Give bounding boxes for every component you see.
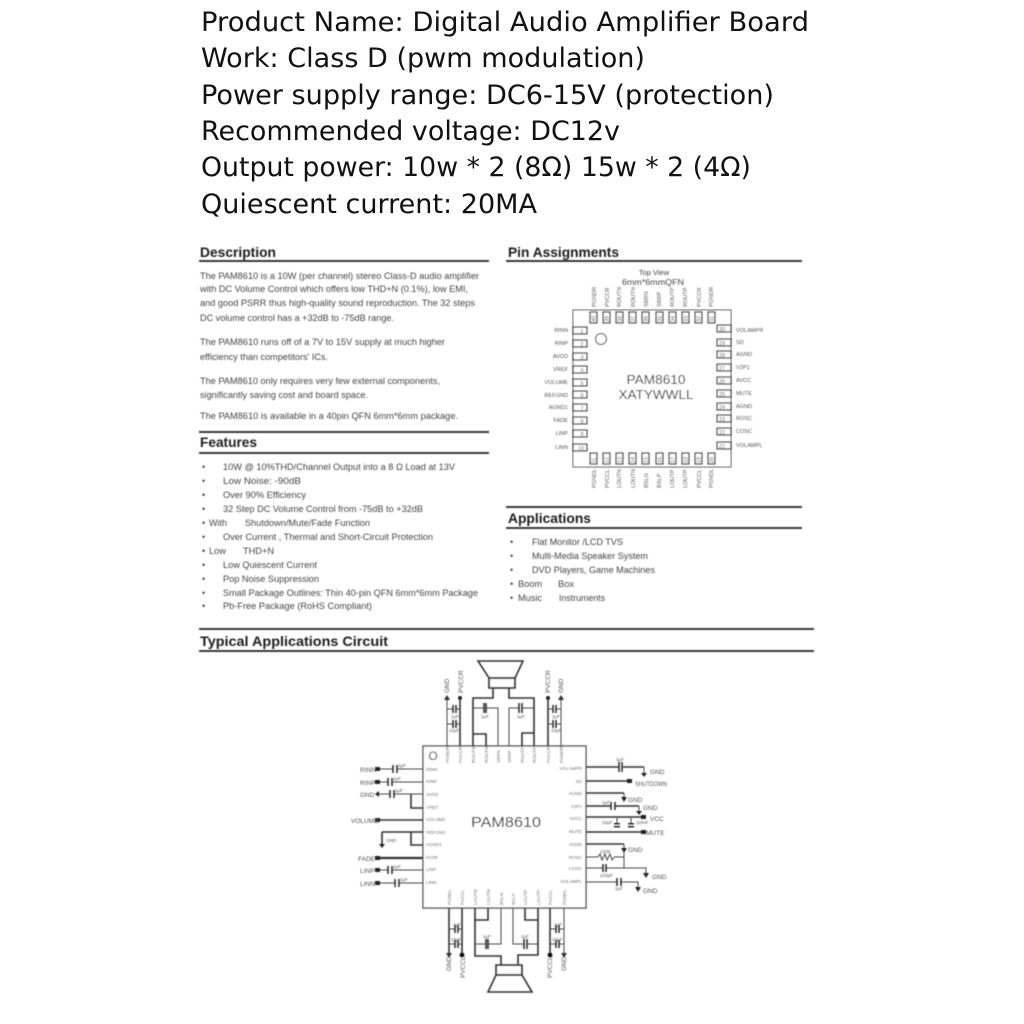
top right power connections (545, 670, 565, 746)
right side output connections (586, 757, 667, 895)
right side output connections: GND (652, 874, 667, 881)
bottom right power connections: PVCCL (547, 956, 554, 978)
bottom pins: 18 (684, 457, 690, 463)
chip inner pin labels: PGNDR (559, 746, 564, 763)
icon: bottom speaker with wiring: 1μF (483, 934, 491, 939)
bottom pins: PVCCL (605, 469, 611, 488)
top pins: 38 (618, 316, 624, 322)
right side output connections: 120K (600, 849, 612, 854)
applications list (510, 537, 655, 603)
bottom pins: LOUTP (670, 469, 676, 488)
right side output connections: 1μF (615, 886, 623, 891)
description paragraphs: The PAM8610 is a 10W (per channel) stereo Class-D audio amplifier (200, 271, 479, 281)
bottom pins: LOUTN (631, 469, 637, 488)
chip inner pin labels: BSLN (499, 893, 504, 905)
bottom pins: 13 (618, 457, 624, 463)
bottom pins: 20 (710, 457, 716, 463)
chip inner pin labels: LOUTP (536, 890, 541, 905)
right pins: V2P1 (736, 365, 750, 371)
description paragraphs (199, 271, 479, 421)
title: product specifications: Output power: 10w * 2 (8Ω) 15w * 2 (4Ω) (201, 152, 751, 183)
left pins: VOLUME (544, 380, 568, 386)
chip inner pin labels: SBRN (496, 750, 501, 763)
circuit amplifier chip: PAM8610 (471, 814, 541, 831)
left pins: RINP (555, 341, 568, 347)
applications list: • (510, 537, 513, 547)
bottom pins: LOUTP (683, 469, 689, 488)
applications list: • (510, 593, 513, 603)
chip inner pin labels: RINP (426, 779, 437, 784)
top pins: ROUTN (631, 287, 637, 307)
chip inner pin labels: FADE (426, 855, 438, 860)
bottom pins: LOUTN (617, 469, 623, 488)
chip inner pin labels: ROUTN (484, 747, 489, 763)
right side output connections: 10μF (602, 820, 613, 825)
top pins: 36 (644, 316, 650, 322)
top pins: ROUTN (617, 287, 623, 307)
panel: applications (506, 507, 802, 603)
chip inner pin labels: LOUTN (473, 889, 478, 905)
applications list: • (510, 565, 513, 575)
right side output connections: 110nF (636, 820, 649, 825)
description paragraphs: The PAM8610 runs off of a 7V to 15V supply at much higher (200, 337, 445, 347)
right pins: 24 (719, 405, 725, 411)
features list: • (202, 601, 205, 611)
description paragraphs: and good PSRR thus high-quality sound reproduction. The 32 steps (200, 298, 476, 308)
description paragraphs: DC volume control has a +32dB to -75dB range. (200, 313, 394, 323)
features list: Over Current , Thermal and Short-Circuit Protection (223, 532, 433, 542)
bottom pins: 12 (604, 457, 610, 463)
bottom pins: BSLP (657, 473, 663, 488)
bottom pins: PGNDL (592, 469, 598, 488)
features list: THD+N (243, 546, 274, 556)
top pins: SBRP (657, 291, 663, 307)
top pins: 37 (630, 316, 636, 322)
features list: • (202, 588, 205, 598)
top pins: 34 (670, 316, 676, 322)
chip inner pin labels: V2P1 (571, 804, 582, 809)
heading: typical applications circuit: Typical Applications Circuit (200, 633, 388, 649)
top pins: ROUTP (683, 287, 689, 307)
left side input connections: LINN (360, 881, 375, 888)
features list: • (202, 532, 205, 542)
right side output connections: 1μF (602, 800, 610, 805)
top view caption: 6mm*6mmQFN (622, 278, 684, 287)
icon: top speaker with wiring (473, 661, 534, 746)
left side input connections: RINP (360, 780, 376, 787)
bottom right power connections: 10μF (552, 937, 563, 942)
chip inner pin labels: PGNDL (447, 889, 452, 905)
features list: • (202, 546, 205, 556)
right pins: AGND (736, 352, 752, 358)
left pins: 4 (580, 368, 584, 374)
panel: pin assignments (506, 244, 802, 488)
chip inner pin labels: LOUTP (523, 890, 528, 905)
left pins: 6 (580, 393, 584, 399)
bottom pins: PVCCL (697, 469, 703, 488)
chip package diagram (544, 287, 763, 488)
bottom right power connections: GND (561, 956, 568, 971)
bottom pins: 11 (592, 457, 598, 463)
right pins: 26 (719, 379, 725, 385)
bottom pins: 15 (644, 457, 650, 463)
chip inner pin labels: COSC (569, 866, 583, 871)
chip inner pin labels: PVCCL (548, 889, 553, 905)
features list: Low (209, 546, 227, 556)
top pins (590, 287, 716, 323)
icon: bottom speaker with wiring: 1μF (521, 934, 529, 939)
circuit amplifier chip (423, 746, 586, 908)
panel: typical applications circuit (199, 629, 814, 992)
right side output connections: GND (643, 888, 658, 895)
features list: 32 Step DC Volume Control from -75dB to +32dB (223, 504, 423, 514)
bottom left power connections: 1μF (453, 922, 461, 927)
left side input connections: 1μF (393, 776, 401, 781)
chip inner pin labels: ROUTP (532, 747, 537, 763)
title: product specifications: Work: Class D (pwm modulation) (201, 43, 645, 74)
right pins: AGND (736, 404, 752, 410)
chip inner pin labels: ROUTN (471, 747, 476, 763)
features list: • (202, 560, 205, 570)
heading: applications: Applications (508, 510, 591, 526)
applications list: Instruments (559, 593, 605, 603)
applications list: Multi-Media Speaker System (532, 551, 648, 561)
chip inner pin labels: AVCC (570, 816, 583, 821)
top pins: 35 (658, 316, 664, 322)
chip inner pin labels: REFGND (426, 830, 446, 835)
bottom left power connections: 10μF (451, 937, 462, 942)
bottom left power connections: GND (446, 956, 453, 971)
top right power connections: GND (558, 678, 565, 693)
chip inner pin labels: AGND1 (426, 842, 442, 847)
left side input connections: 1μF (393, 864, 401, 869)
description paragraphs: with DC Volume Control which offers low THD+N (0.1%), low EMI, (199, 284, 468, 294)
features list: • (202, 504, 205, 514)
features list: Pb-Free Package (RoHS Compliant) (223, 601, 372, 611)
left side input connections: LINP (360, 868, 374, 875)
left pins: 8 (580, 419, 584, 425)
right pins: 28 (719, 353, 725, 359)
features list: • (202, 518, 205, 528)
chip inner pin labels: VOLUME (426, 817, 445, 822)
top left power connections: 10μF (449, 728, 460, 733)
bottom right power connections: 1μF (554, 922, 562, 927)
icon: top speaker with wiring: 1μF (517, 714, 525, 719)
top right power connections: 1μF (552, 714, 560, 719)
bottom pins: PGNDL (709, 469, 715, 488)
right side output connections: GND (628, 847, 643, 854)
right pins: 30 (719, 327, 725, 333)
description paragraphs: The PAM8610 only requires very few external components, (200, 376, 440, 386)
left side input connections: 1μF (395, 788, 403, 793)
top pins: 31 (710, 316, 716, 322)
features list: Over 90% Efficiency (223, 490, 307, 500)
chip inner pin labels: LINN (426, 880, 436, 885)
left side input connections: 1μF (400, 877, 408, 882)
left pins: RINN (554, 328, 568, 334)
left pins: REFGND (544, 393, 568, 399)
chip inner pin labels: PVCCR (458, 746, 463, 763)
bottom right power connections (547, 908, 568, 978)
chip inner pin labels: BSLP (511, 893, 516, 905)
left pins: FADE (553, 418, 568, 424)
chip inner pin labels: PGNDL (562, 889, 567, 905)
left pins: 1 (580, 329, 584, 335)
left pins (544, 327, 587, 452)
chip inner pin labels: AGND (569, 791, 583, 796)
right pins (717, 325, 763, 450)
left side input connections (351, 763, 423, 888)
applications list: • (510, 551, 513, 561)
applications list: Boom (518, 579, 542, 589)
circuit amplifier chip: O (428, 749, 438, 763)
applications list: • (510, 579, 513, 589)
features list: Low Quiescent Current (223, 560, 318, 570)
left pins: VREF (553, 367, 569, 373)
features list: • (202, 462, 205, 472)
datasheet content (199, 244, 814, 992)
right pins: 22 (719, 430, 725, 436)
features list: • (202, 490, 205, 500)
bottom pins: 14 (630, 457, 636, 463)
right pins: AVCC (736, 378, 751, 384)
left pins: AGND1 (549, 405, 568, 411)
features list: 10W @ 10%THD/Channel Output into a 8 Ω Load at 13V (223, 462, 455, 472)
right side output connections: SHUTDOWN (635, 781, 667, 788)
top left power connections: 1μF (451, 714, 459, 719)
right pins: MUTE (736, 391, 752, 397)
bottom pins (590, 453, 716, 488)
chip inner pin labels: PVCCL (460, 889, 465, 905)
description paragraphs: significantly saving cost and board space. (200, 390, 368, 400)
bottom left power connections (446, 908, 467, 978)
icon: top speaker with wiring: 1μF (481, 714, 489, 719)
heading: features: Features (200, 434, 257, 450)
features list: Low Noise: -90dB (223, 476, 301, 486)
title: product specifications: Quiescent current: 20MA (201, 189, 538, 220)
chip inner pin labels: AGND (569, 842, 583, 847)
top left power connections: PVCCR (458, 670, 465, 693)
left pins: LINN (555, 445, 568, 451)
left pins: 9 (580, 432, 584, 438)
chip inner pin labels: AVDD (426, 792, 439, 797)
right side output connections: MUTE (646, 830, 665, 837)
chip inner pin labels: SD (576, 779, 583, 784)
top pins: PVCCR (697, 287, 703, 307)
features list: • (202, 574, 205, 584)
top right power connections: PVCCR (545, 670, 552, 693)
title: product specifications: Recommended voltage: DC12v (201, 116, 620, 147)
left pins: 3 (580, 355, 584, 361)
left side input connections: RINN (360, 767, 376, 774)
left side input connections: FADE (358, 856, 376, 863)
left pins: AVDD (553, 354, 568, 360)
top view caption: Top View (639, 268, 670, 277)
left pins: 7 (580, 406, 584, 412)
bottom pins: BSLN (644, 473, 650, 488)
panel: features (199, 432, 489, 611)
chip inner pin labels: SBRP (507, 750, 512, 763)
right pins: COSC (736, 429, 752, 435)
chip inner pin labels: ROSC (569, 855, 583, 860)
icon: bottom speaker with wiring (475, 908, 538, 992)
right pins: 21 (719, 444, 725, 450)
chip inner pin labels (426, 746, 583, 905)
title: product specifications (201, 7, 809, 220)
heading: description: Description (200, 244, 276, 260)
top pins: ROUTP (670, 287, 676, 307)
right pins: 27 (719, 366, 725, 372)
right side output connections: GND (643, 805, 658, 812)
chip inner pin labels: RINN (426, 767, 437, 772)
left pins: 10 (578, 446, 584, 452)
chip inner pin labels: LINP (426, 867, 436, 872)
title: product specifications: Power supply range: DC6-15V (protection) (201, 80, 774, 111)
bottom pins: 19 (696, 457, 702, 463)
top pins: PGNDR (709, 287, 715, 307)
right pins: 29 (719, 341, 725, 347)
features list: Pop Noise Suppression (223, 574, 319, 584)
bottom pins: 16 (658, 457, 664, 463)
top pins: SBRN (644, 291, 650, 307)
features list: With (209, 518, 227, 528)
features list: Small Package Outlines: Thin 40-pin QFN 6mm*6mm Package (223, 588, 478, 598)
features list: • (202, 476, 205, 486)
heading: pin assignments: Pin Assignments (508, 244, 619, 260)
features list (202, 462, 478, 611)
left side input connections: GND (360, 792, 375, 799)
features list: Shutdown/Mute/Fade Function (245, 518, 370, 528)
applications list: Music (518, 593, 542, 603)
left pins: LINP (556, 431, 568, 437)
right pins: 25 (719, 392, 725, 398)
chip inner pin labels: ROUTP (520, 747, 525, 763)
left pins: 2 (580, 342, 584, 348)
panel: description (199, 244, 489, 421)
top pins: 33 (684, 316, 690, 322)
right pins: SD (736, 340, 744, 346)
chip inner pin labels: PGNDR (445, 746, 450, 763)
left side input connections: 1μF (398, 763, 406, 768)
right side output connections: VCC (650, 816, 664, 823)
applications list: DVD Players, Game Machines (532, 565, 655, 575)
right pins: ROSC (736, 416, 752, 422)
top pins: 32 (696, 316, 702, 322)
right pins: VOLAMPL (736, 443, 762, 449)
chip inner pin labels: LOUTN (486, 889, 491, 905)
top pins: 40 (592, 316, 598, 322)
top right power connections: 10μF (551, 728, 562, 733)
top pins: PGNDR (592, 287, 598, 307)
chip inner pin labels: VOLAMPR (560, 766, 583, 771)
top left power connections: GND (444, 678, 451, 693)
bottom pins: 17 (670, 457, 676, 463)
bottom left power connections: PVCCL (460, 956, 467, 978)
chip inner pin labels: VREF (426, 805, 438, 810)
right side output connections: GND (628, 797, 643, 804)
title: product specifications: Product Name: Digital Audio Amplifier Board (201, 7, 809, 38)
chip inner pin labels: VOLAMPL (560, 879, 582, 884)
left pins: 5 (580, 381, 584, 387)
chip inner pin labels: PVCCR (546, 746, 551, 763)
top pins: PVCCR (605, 287, 611, 307)
right pins: 23 (719, 417, 725, 423)
chip inner pin labels: MUTE (569, 829, 582, 834)
applications list: Box (558, 579, 575, 589)
description paragraphs: The PAM8610 is available in a 40pin QFN 6mm*6mm package. (200, 411, 458, 421)
top left power connections (444, 670, 465, 746)
chip package diagram: XATYWWLL (618, 387, 694, 402)
right side output connections: 1μF (616, 757, 624, 762)
left side input connections: VOLUME (351, 818, 379, 825)
top view caption (622, 268, 684, 287)
description paragraphs: efficiency than competitors' ICs. (200, 352, 328, 362)
right pins: VOLAMPR (736, 328, 763, 334)
right side output connections: 220pF (600, 873, 613, 878)
chip package diagram: PAM8610 (626, 372, 686, 387)
left side input connections: GND (386, 838, 397, 843)
right side output connections: GND (650, 769, 665, 776)
applications list: Flat Monitor /LCD TVS (532, 537, 623, 547)
top pins: 39 (604, 316, 610, 322)
